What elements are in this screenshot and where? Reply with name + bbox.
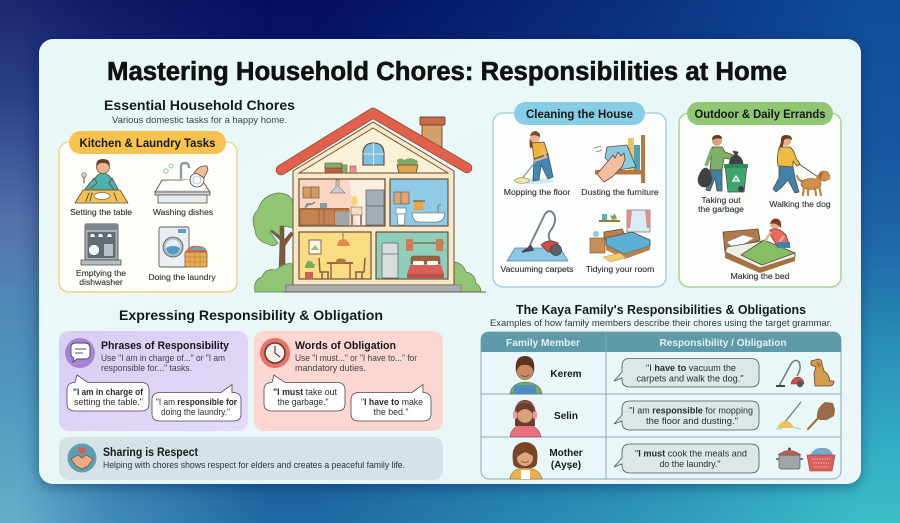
label: setting the table: Setting the table <box>70 207 132 217</box>
speech bubble: Mother <box>614 444 759 473</box>
icon: dishwasher <box>81 224 121 265</box>
table header: Responsibility / Obligation <box>660 338 786 349</box>
table header <box>481 332 841 352</box>
dining room <box>299 232 371 279</box>
speech bubble: in charge: setting the table." <box>74 397 143 407</box>
label: taking out the garbage <box>698 195 744 214</box>
speech bubble: in charge <box>67 375 149 411</box>
panel: cleaning the house <box>493 102 666 287</box>
text: phrases: Use "I am in charge of..." or "I am <box>101 353 225 363</box>
pill heading: outdoor <box>687 102 833 125</box>
avatar: Mother <box>510 442 542 479</box>
text: obligation: mandatory duties. <box>295 363 366 373</box>
name: Mother: (Ayşe) <box>551 460 581 471</box>
speech bubble: responsible for: "I am responsible for <box>156 397 237 407</box>
speech bubble: have to <box>351 384 431 421</box>
icon: handshake and heart <box>68 444 96 472</box>
heading: the Kaya family: The Kaya Family's Responsibilities & Obligations <box>516 303 806 317</box>
speech bubble: Mother: "I must cook the meals and <box>635 448 747 458</box>
text: phrases: responsible for..." tasks. <box>101 363 192 373</box>
row: Selin <box>510 400 835 437</box>
speech bubble: responsible for: doing the laundry." <box>161 407 230 417</box>
icon: laundry basket <box>807 448 835 471</box>
trees and bushes <box>253 193 481 292</box>
section heading: essential chores: Essential Household Chores <box>104 97 295 113</box>
pill heading: outdoor: Outdoor & Daily Errands <box>694 107 826 121</box>
icon: mopping the floor <box>514 131 554 184</box>
text: obligation <box>295 340 417 373</box>
panel: words of obligation <box>254 331 443 431</box>
text: obligation: Words of Obligation <box>295 340 396 352</box>
icon: setting the table <box>75 159 128 203</box>
table header: Family Member <box>506 338 580 349</box>
text: obligation: Use "I must..." or "I have to..." for <box>295 353 417 363</box>
main card <box>39 39 861 484</box>
name: Kerem: Kerem <box>550 369 582 380</box>
kitchen room <box>299 179 385 226</box>
speech bubble: Selin <box>614 401 759 430</box>
icon: making the bed <box>723 219 795 273</box>
speech bubble: Kerem <box>614 358 759 387</box>
panel: sharing is respect <box>59 437 443 480</box>
text: phrases: Phrases of Responsibility <box>101 340 230 352</box>
name: Mother: Mother <box>549 448 583 459</box>
label: doing the laundry: Doing the laundry <box>148 272 216 282</box>
row: Kerem <box>510 356 834 394</box>
row: Mother <box>510 442 835 479</box>
label: mopping the floor: Mopping the floor <box>504 187 570 197</box>
speech bubble: must: the garbage." <box>278 397 328 407</box>
panel: phrases of responsibility <box>59 331 248 431</box>
pill heading: kitchen: Kitchen & Laundry Tasks <box>80 136 216 150</box>
label: walking the dog: Walking the dog <box>769 199 831 209</box>
icon: washing machine and basket <box>159 227 207 267</box>
icon: tidying your room <box>590 210 650 262</box>
speech bubble: responsible for <box>152 384 241 421</box>
heading: the Kaya family <box>490 303 832 328</box>
icon: dog <box>811 359 834 386</box>
table: family responsibilities <box>481 332 841 479</box>
chimney <box>420 117 445 147</box>
name: Selin: Selin <box>554 411 578 422</box>
avatar: Kerem <box>510 356 542 394</box>
label: emptying the dishwasher: Emptying the <box>76 268 126 278</box>
house body <box>293 122 454 285</box>
icon: vacuum <box>776 360 804 387</box>
speech bubble: Mother: do the laundry." <box>660 459 720 469</box>
icon: feather duster <box>808 402 835 429</box>
icon: cooking pot <box>776 448 803 469</box>
section heading: essential chores <box>104 97 295 126</box>
panel: outdoor and daily errands <box>679 102 841 287</box>
icon: dusting the furniture <box>594 135 645 183</box>
title: Mastering Household Chores: Responsibilities at Home <box>107 58 787 86</box>
bedroom <box>376 232 448 279</box>
section heading: essential chores: Various domestic tasks for a happy home. <box>112 115 287 126</box>
dog walking on leash <box>797 171 831 195</box>
name: Mother <box>549 448 583 471</box>
pill heading: cleaning <box>514 102 645 125</box>
text: sharing <box>103 445 405 470</box>
icon: vacuuming carpets <box>507 211 568 261</box>
text: sharing: Sharing is Respect <box>103 445 198 459</box>
pill heading: kitchen <box>69 131 226 154</box>
icon: washing dishes <box>155 163 210 203</box>
speech bubble: Selin: "I am responsible for mopping <box>629 406 753 416</box>
illustration: house <box>253 113 486 292</box>
speech bubble: must <box>264 375 345 411</box>
heading: the Kaya family: Examples of how family members describe their chores using the target grammar. <box>490 318 832 328</box>
pill heading: cleaning: Cleaning the House <box>526 107 633 121</box>
card shadow <box>39 39 861 484</box>
speech bubble: must: "I must take out <box>273 387 337 397</box>
bathroom <box>390 179 448 226</box>
label: washing dishes: Washing dishes <box>153 207 213 217</box>
icon: walking the dog <box>773 135 831 195</box>
icon: taking out the garbage <box>698 135 748 192</box>
text: sharing: Helping with chores shows respect for elders and creates a peaceful family life. <box>103 460 405 470</box>
icon: mop <box>776 402 801 429</box>
speech bubble: have to: the bed." <box>374 407 408 417</box>
speech bubble: in charge: "I am in charge of <box>73 387 144 397</box>
speech bubble: Selin: the floor and dusting." <box>646 416 738 426</box>
label: emptying the dishwasher <box>76 268 126 287</box>
icon: clock <box>260 338 290 368</box>
text: phrases <box>101 340 230 373</box>
label: dusting the furniture: Dusting the furniture <box>581 187 659 197</box>
avatar: Selin <box>510 400 541 437</box>
label: taking out the garbage: Taking out <box>701 195 741 205</box>
label: emptying the dishwasher: dishwasher <box>79 277 123 287</box>
attic <box>299 128 448 173</box>
speech bubble: Kerem: carpets and walk the dog." <box>636 374 744 384</box>
label: tidying your room: Tidying your room <box>586 264 654 274</box>
foundation and ground <box>283 285 486 292</box>
panel: kitchen and laundry tasks <box>59 131 237 292</box>
roof <box>281 113 467 170</box>
speech bubble: Kerem: "I have to vacuum the <box>646 363 736 373</box>
label: making the bed: Making the bed <box>731 271 790 281</box>
heading: expressing responsibility: Expressing Responsibility & Obligation <box>119 307 383 323</box>
label: taking out the garbage: the garbage <box>698 204 744 214</box>
icon: speech bubble <box>65 338 95 368</box>
speech bubble: have to: "I have to make <box>361 397 423 407</box>
label: vacuuming carpets: Vacuuming carpets <box>501 264 573 274</box>
